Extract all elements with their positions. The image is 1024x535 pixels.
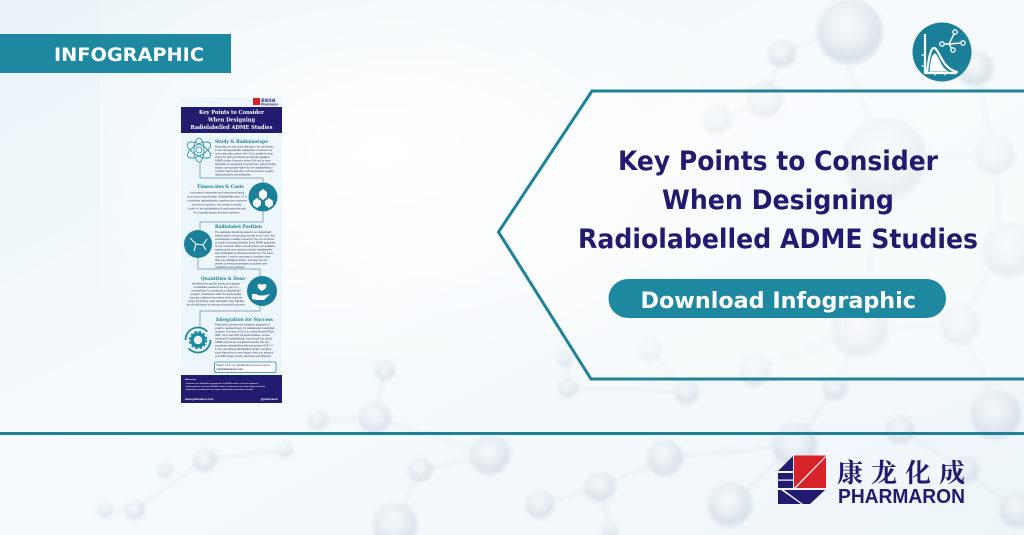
- section: Timescales & Costs: Timescales & Costs: [197, 184, 244, 190]
- section: Quantities & Dose: program. Parameters within the study design: [191, 292, 242, 296]
- thumbnail title banner: Key Points to Consider: [199, 110, 264, 116]
- icon: gear with cycle arrows: [186, 328, 210, 352]
- section: Radiolabel Position: stable position of your drug, but this is not 'fixed', and: [215, 234, 275, 238]
- thumbnail title banner: [181, 107, 282, 133]
- thumbnail footer: • Guidance on radiolabelling approaches for ADME studies in drug development: [185, 382, 259, 385]
- thumbnail logo: 康龙化成: [261, 98, 276, 104]
- section: Radiolabel Position: balancing this core and point of label (radiolabelled: [215, 248, 273, 252]
- section: Quantities & Dose: [187, 276, 246, 306]
- section: Integration for Success: GMC, GLP, and GCP-compliant facilities, ensure: [215, 333, 270, 337]
- callout: contact box: Reach out to our radiolabelled services experts:: [216, 363, 271, 367]
- section: Radiolabel Position: Radiolabel Position: [215, 224, 262, 230]
- section: Integration for Success: Integration for Success: [216, 317, 273, 323]
- section: Quantities & Dose: are all vital factors in ensuring successful outcomes.: [187, 302, 246, 306]
- section: Radiolabel Position: phases or chemical strategies to address both: [215, 262, 268, 266]
- section: Quantities & Dose: of radiolabel needed is the key, as it is a: [193, 285, 239, 289]
- section: Study & Radioisotope: oligonucleotides and antibodies.: [215, 172, 252, 176]
- section: Quantities & Dose: Identifying the specific activity and quantity: [192, 282, 241, 286]
- section: Study & Radioisotope: applicable for assessing long half-lives, higher binding: [215, 162, 276, 166]
- icon: PK curve and molecule: [912, 22, 972, 82]
- thumbnail title banner: When Designing: [207, 118, 255, 124]
- logo english name: PHARMARON: [838, 485, 965, 508]
- section: Integration for Success: small for radiosynthesis, for radiolabelled metabolism: [215, 326, 275, 330]
- section: Radiolabel Position: The radiolabel should be placed in a metabolically: [215, 230, 272, 234]
- section: Integration for Success: coordinate radiolabelling with and conduct GCP ¹⁴C: [215, 344, 273, 348]
- title: [578, 146, 978, 255]
- section: Integration for Success: hundreds of radiolabelling, from clinical and clinical: [215, 336, 273, 340]
- section: Study & Radioisotope: most molecules, carbon-14 (¹⁴C) is usually the best: [215, 152, 273, 156]
- section: Study & Radioisotope: ADME studies. However, tritium (³H) can be more: [215, 158, 271, 162]
- icon: radiolabel position: [184, 230, 212, 258]
- icon: hand with hearts: [247, 276, 277, 306]
- logo mark: [778, 456, 826, 504]
- thumbnail logo: [253, 98, 278, 106]
- title: Radiolabelled ADME Studies: [578, 224, 978, 255]
- section: Study & Radioisotope: complex macromolecules, such as proteins, peptide: [215, 169, 274, 173]
- banner: INFOGRAPHIC: [0, 34, 231, 73]
- icon: atom: [185, 138, 213, 162]
- section: Timescales & Costs: and time to complete, from weeks to months.: [192, 202, 243, 206]
- thumbnail title banner: Radiolabelled ADME Studies: [190, 125, 273, 131]
- thumbnail footer: @pharmaron: [261, 397, 278, 401]
- section: Timescales & Costs: ³H is typically quicker and less expensive.: [194, 210, 241, 214]
- callout: contact box: info@pharmaron.com: [216, 367, 244, 371]
- callout: contact box: [214, 362, 276, 372]
- section: Study & Radioisotope: Depending on your study objectives, we can assess: [215, 144, 274, 148]
- banner: INFOGRAPHIC: INFOGRAPHIC: [54, 45, 204, 66]
- section: Quantities & Dose: drug, high binding, dose calculation, long half-life): [188, 299, 244, 303]
- section: Integration for Success: your R&D project simply, effectively and efficiently.: [215, 354, 272, 358]
- section: Timescales & Costs: as a primary consideration. Radiolabelling with ¹⁴C is: [187, 194, 248, 198]
- button: Download Infographic: [608, 279, 946, 318]
- section: Radiolabel Position: molecules, it may be necessary to consider more: [215, 254, 271, 258]
- thumbnail logo: Pharmaron: [261, 102, 278, 106]
- section: Radiolabel Position: of your molecule. When several options are available,: [215, 244, 276, 248]
- thumbnail background: [181, 97, 282, 403]
- section: Timescales & Costs: Your project's timescales and costs should factor: [190, 190, 245, 194]
- section: Study & Radioisotope: assays, and typically higher for the radiolabelling of: [215, 166, 273, 170]
- section: Radiolabel Position: [215, 224, 276, 269]
- section: Integration for Success: [215, 317, 275, 358]
- section: Radiolabel Position: and metabolism) is discussed at this key. The same: [215, 251, 274, 255]
- title: Key Points to Consider: [618, 146, 938, 177]
- section: Integration for Success: study objectives at every stage to help you advance: [215, 350, 274, 354]
- logo: Pharmaron: [778, 453, 965, 508]
- logo chinese name: 康龙化成: [837, 453, 965, 490]
- section: Radiolabel Position: to enable full characterisation of the ADME properties: [215, 240, 276, 244]
- section: Quantities & Dose: Quantities & Dose: [201, 276, 245, 282]
- thumbnail footer: www.pharmaron.com: [184, 397, 214, 401]
- section: Study & Radioisotope: Study & Radioisotope: [215, 139, 268, 145]
- title: When Designing: [662, 185, 894, 216]
- section: Timescales & Costs: Under ³H, the radiolabelling of small molecules with: [188, 206, 247, 210]
- background glow: [100, 0, 800, 430]
- thumbnail footer: References: [185, 378, 197, 381]
- button: Download Infographic: Download Infographic: [640, 289, 916, 314]
- connector lines: [198, 162, 263, 327]
- infographic thumbnail: [181, 97, 282, 403]
- section: Integration for Success: activities. Our team of 50 or so radiochemists (PhDs,: [215, 330, 275, 334]
- thumbnail footer: • Regulatory considerations for human radiolabelled mass balance studies: [185, 388, 253, 391]
- section: Quantities & Dose: (species, radiolevel and nature of the molecule: [190, 296, 243, 300]
- thumbnail footer: • Radiosynthesis and human ADME studies: considerations for study design and safety: [185, 385, 266, 388]
- section: Radiolabel Position: metabolism and synthesis.: [215, 265, 245, 269]
- section: Radiolabel Position: than one radiolabel position, and there are two: [215, 258, 268, 262]
- section: Integration for Success: ADME projects are completed annually. We can: [215, 340, 269, 344]
- section: Timescales & Costs: a multi-step radiosynthesis, requiring more resources: [187, 198, 248, 202]
- arrow panel outline: [498, 91, 1024, 379]
- section: Study & Radioisotope: choice for both pre-clinical and clinical regulatory: [215, 155, 271, 159]
- section: Radiolabel Position: consideration is ideally needed for the core structure: [215, 237, 275, 241]
- section: Timescales & Costs: [187, 184, 248, 214]
- section: Study & Radioisotope: [215, 139, 276, 176]
- section: Quantities & Dose: consideration for conducting a radiolabelled: [191, 288, 241, 292]
- section: Integration for Success: in vitro and clinical radiolabelled studies, including: [215, 347, 272, 351]
- section: Study & Radioisotope: in vitro and appropriate radioisotope to assess. For: [215, 148, 272, 152]
- section: Integration for Success: Pharmaron provides fully integrated programs of: [215, 322, 270, 326]
- thumbnail footer: [181, 375, 282, 403]
- divider line: [0, 432, 1024, 435]
- icon: timescales and costs: [248, 182, 278, 212]
